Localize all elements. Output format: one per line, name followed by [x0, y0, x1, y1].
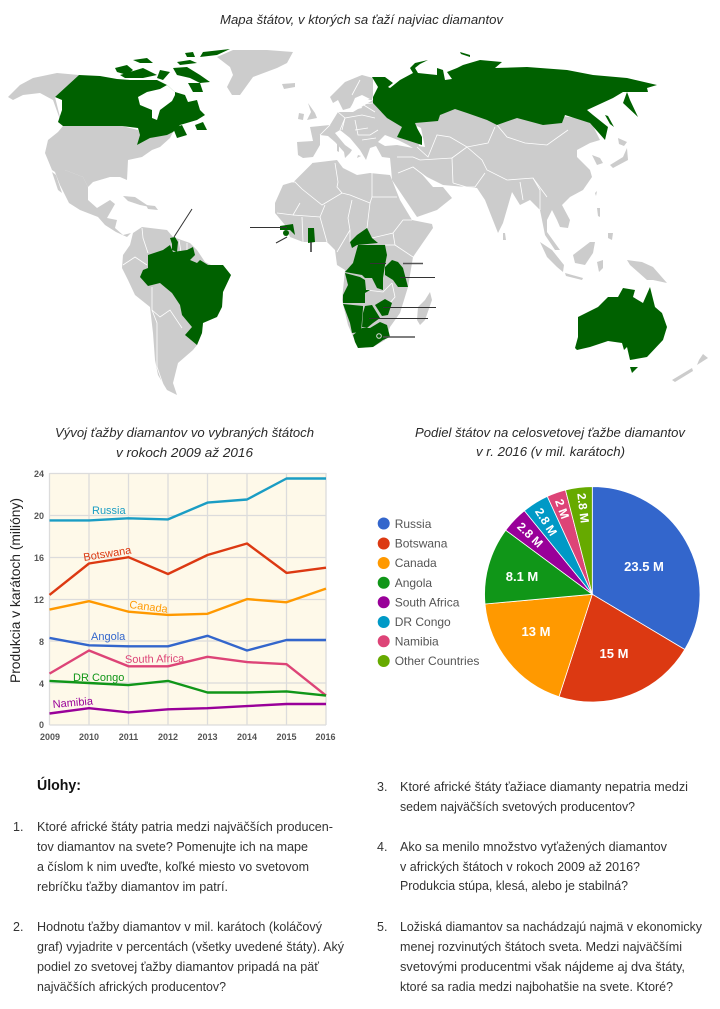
task 2 — [13, 920, 345, 994]
task 2: 2. — [13, 920, 23, 934]
task 5 — [377, 920, 703, 994]
legend: Angola — [395, 576, 432, 590]
task 4 — [377, 840, 668, 893]
x axis ticks: 2010 — [79, 732, 99, 742]
pie chart: 2.8 M — [532, 506, 560, 538]
x axis ticks: 2014 — [237, 732, 257, 742]
leader lines — [174, 209, 436, 337]
world map — [8, 49, 708, 395]
task 2: najväčších afrických producentov? — [37, 980, 226, 994]
task 5: Ložiská diamantov sa nachádzajú najmä v ekonomicky — [400, 920, 703, 934]
series: Canada: Canada — [129, 599, 169, 616]
highlighted: Canada — [55, 49, 230, 145]
heading: pie chart: v r. 2016 (v mil. karátoch) — [476, 444, 625, 459]
y axis ticks — [34, 469, 44, 730]
pie chart: 8.1 M — [506, 569, 538, 584]
y axis ticks: 12 — [34, 595, 44, 605]
heading: line chart: Vývoj ťažby diamantov vo vybraných štátoch — [55, 425, 314, 440]
y axis title: Produkcia v karátoch (milióny) — [7, 498, 23, 683]
series: Russia: Russia — [92, 505, 127, 517]
heading: line chart — [55, 425, 314, 460]
task 2: Hodnotu ťažby diamantov v mil. karátoch (koláčový — [37, 920, 323, 934]
x axis ticks: 2011 — [119, 732, 138, 742]
task 1: rebríčku ťažby diamantov im patrí. — [37, 880, 228, 894]
pie chart: 2.8 M — [514, 520, 546, 550]
task 5: ktoré sa radia medzi najbohatšie na svete. Ktoré? — [400, 980, 673, 994]
highlighted: Australia — [575, 287, 667, 373]
series: DR Congo — [50, 672, 326, 696]
x axis ticks — [40, 732, 336, 742]
series: Canada — [50, 589, 326, 616]
y axis ticks: 20 — [34, 511, 44, 521]
task 2: graf) vyjadrite v percentách (všetky uvedené štáty). Aký — [37, 940, 345, 954]
series: South Africa: South Africa — [125, 653, 185, 666]
pie chart: 13 M — [522, 624, 550, 639]
legend: Namibia — [395, 634, 439, 648]
task 2: podiel zo svetovej ťažby diamantov pripadá na päť — [37, 960, 319, 974]
heading: tasks: Úlohy: — [37, 776, 81, 794]
series: Namibia — [50, 695, 326, 714]
legend: Other Countries — [395, 654, 479, 668]
series: Angola — [50, 631, 326, 650]
pie chart: 15 M — [600, 646, 628, 661]
title: map: Mapa štátov, v ktorých sa ťaží najviac diamantov — [220, 12, 505, 27]
heading: pie chart: Podiel štátov na celosvetovej ťažbe diamantov — [415, 425, 687, 440]
series: Angola: Angola — [91, 631, 126, 643]
task 4: Ako sa menilo množstvo vyťažených diamantov — [400, 840, 668, 854]
pie chart: 2.8 M — [574, 492, 592, 524]
highlighted: southern Africa — [343, 228, 408, 348]
highlighted: West Africa — [280, 224, 315, 243]
legend: Botswana — [395, 536, 448, 550]
pie chart: 23.5 M — [624, 559, 664, 574]
task 1: a číslom k nim uveďte, koľké miesto vo svetovom — [37, 860, 309, 874]
y axis ticks: 24 — [34, 469, 44, 479]
task 3: 3. — [377, 780, 387, 794]
legend: Canada — [395, 556, 437, 570]
series: Botswana — [50, 544, 326, 595]
line chart — [7, 469, 336, 742]
heading: pie chart — [415, 425, 687, 459]
x axis ticks: 2013 — [197, 732, 218, 742]
legend: DR Congo — [395, 615, 451, 629]
series: South Africa — [50, 650, 326, 696]
task 5: menej rozvinutých štátoch sveta. Medzi najväčšími — [400, 940, 682, 954]
task 4: Produkcia stúpa, klesá, alebo je stabilná? — [400, 879, 628, 893]
y axis ticks: 4 — [39, 679, 44, 689]
x axis ticks: 2016 — [315, 732, 336, 742]
task 1: 1. — [13, 820, 23, 834]
task 1 — [13, 820, 333, 894]
task 3: Ktoré africké štáty ťažiace diamanty nepatria medzi — [400, 780, 688, 794]
x axis ticks: 2009 — [40, 732, 60, 742]
gray landmasses — [8, 50, 708, 395]
task 3: sedem najväčších svetových producentov? — [400, 800, 635, 814]
y axis ticks: 16 — [34, 553, 44, 563]
x axis ticks: 2015 — [276, 732, 297, 742]
series: Botswana: Botswana — [83, 544, 133, 564]
x axis ticks: 2012 — [158, 732, 178, 742]
task 5: svetovými producentmi však nájdeme aj dva štáty, — [400, 960, 685, 974]
legend: Russia — [395, 517, 432, 531]
series: Russia — [50, 478, 326, 520]
task 4: v afrických štátoch v rokoch 2009 až 2016? — [400, 860, 640, 874]
task 1: Ktoré africké štáty patria medzi najväčších producen- — [37, 820, 333, 834]
legend — [378, 517, 479, 668]
y axis ticks: 8 — [39, 637, 44, 647]
highlighted: Brazil — [140, 245, 231, 345]
series: DR Congo: DR Congo — [73, 672, 124, 684]
highlighted: Russia — [372, 52, 657, 145]
country borders — [123, 80, 568, 390]
task 4: 4. — [377, 840, 387, 854]
task 5: 5. — [377, 920, 387, 934]
task 1: tov diamantov na svete? Pomenujte ich na mape — [37, 840, 308, 854]
pie chart — [485, 487, 700, 702]
legend: South Africa — [395, 596, 460, 610]
series: Namibia: Namibia — [52, 695, 94, 711]
heading: line chart: v rokoch 2009 až 2016 — [116, 445, 254, 460]
highlighted: Guyana — [170, 237, 178, 252]
task 3 — [377, 780, 688, 814]
inland seas — [378, 135, 413, 148]
y axis ticks: 0 — [39, 720, 44, 730]
pie chart: 2 M — [552, 497, 572, 521]
